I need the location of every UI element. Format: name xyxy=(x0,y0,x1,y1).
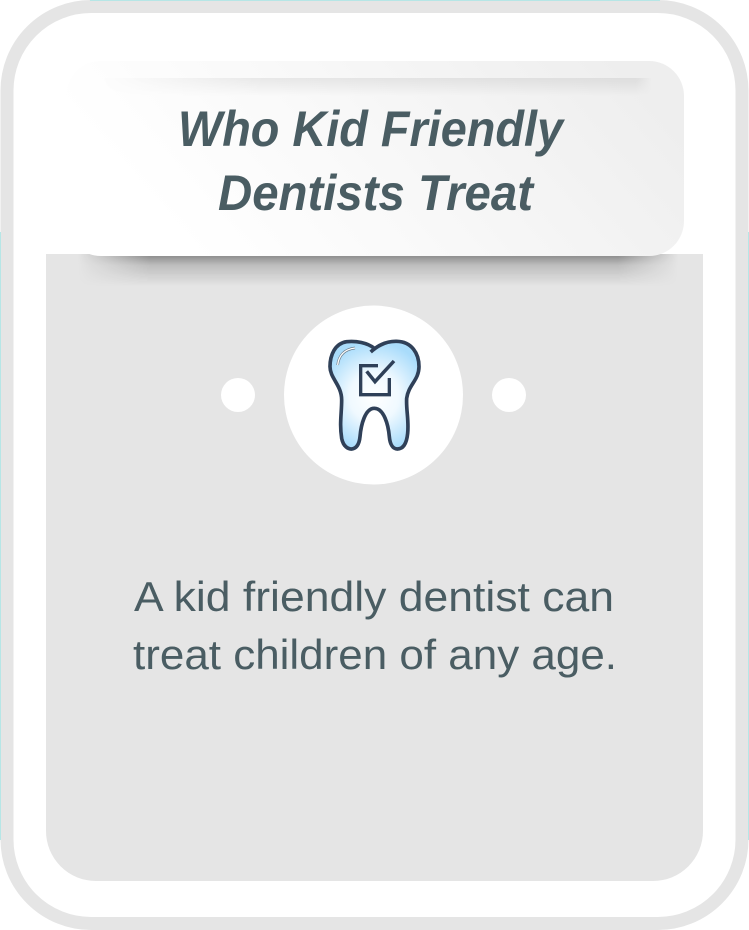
header shadow xyxy=(84,254,673,282)
body text: A kid friendly dentist can xyxy=(134,573,614,620)
icon: tooth with checkbox xyxy=(330,341,419,449)
left dot xyxy=(221,378,255,412)
panel: content background xyxy=(46,254,703,881)
title: Who Kid Friendly xyxy=(178,101,565,157)
right dot xyxy=(492,378,526,412)
icon circle xyxy=(284,306,463,484)
body text: treat children of any age. xyxy=(133,631,617,678)
panel: title card xyxy=(66,61,684,256)
title: Dentists Treat xyxy=(218,165,535,221)
